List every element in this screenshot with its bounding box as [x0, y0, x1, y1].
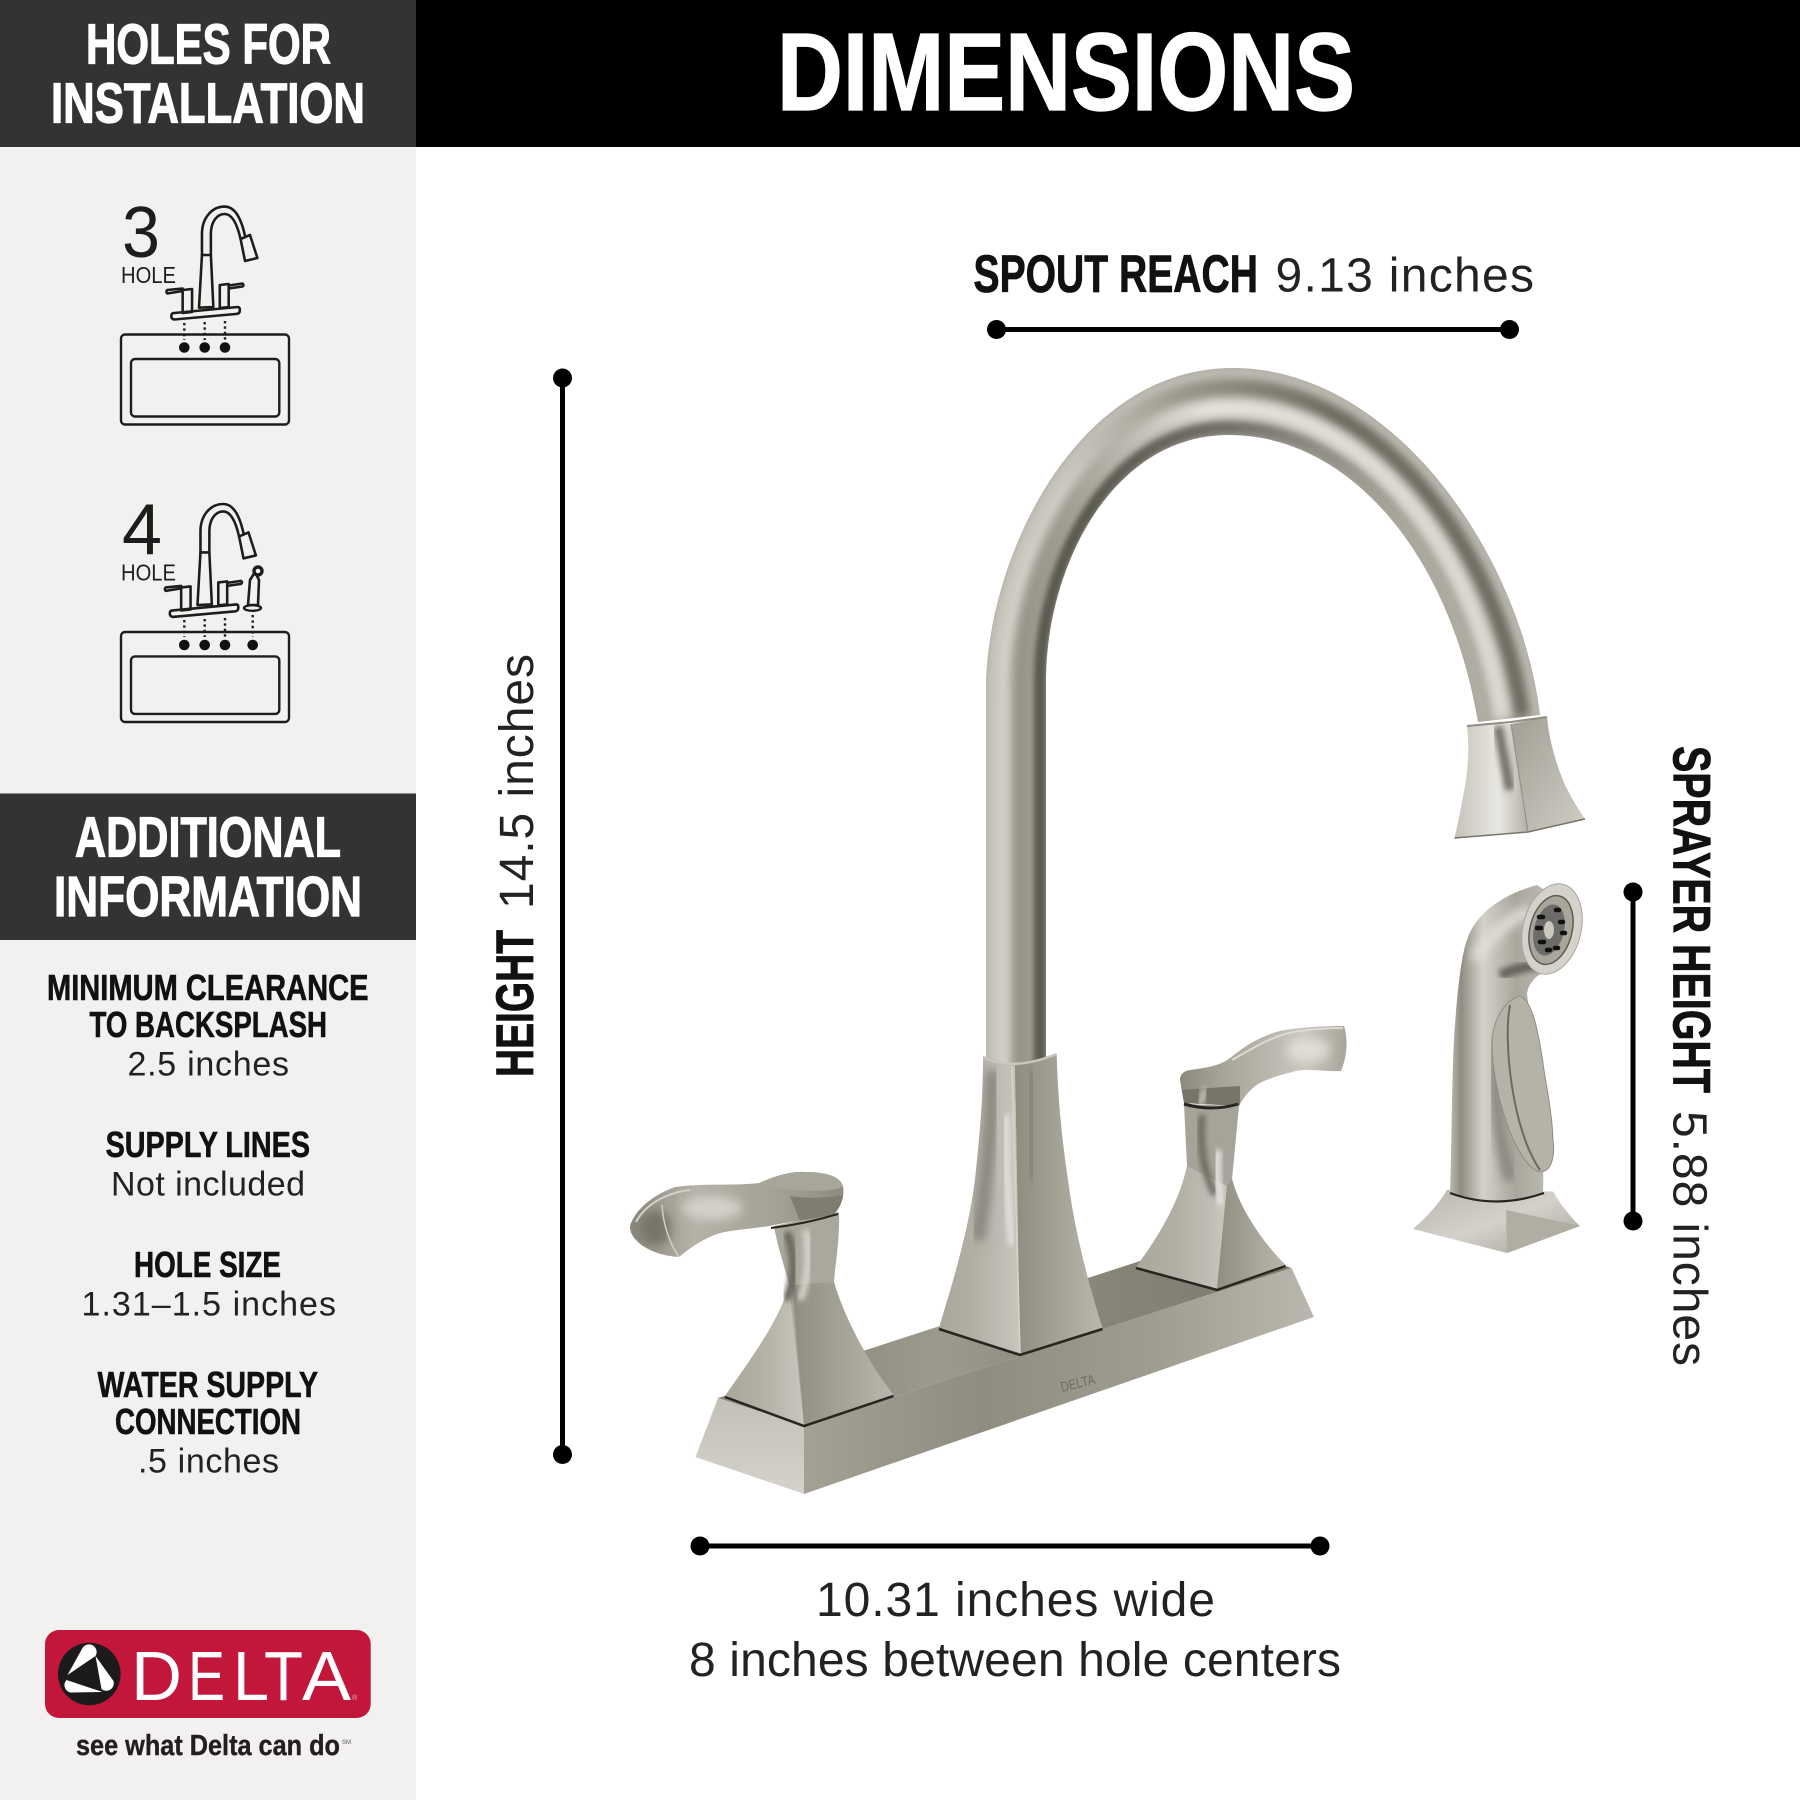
info: hole size: 1.31–1.5 inches [82, 1286, 336, 1324]
info: hole size: HOLE SIZE [134, 1244, 281, 1285]
deck plate [696, 1240, 1314, 1494]
left lever [630, 1172, 843, 1257]
info: water supply connection: CONNECTION [115, 1401, 301, 1442]
info: supply lines [106, 1124, 310, 1204]
info: water supply connection [98, 1364, 318, 1480]
right handle [1136, 1026, 1347, 1290]
info: minimum clearance: MINIMUM CLEARANCE [47, 967, 368, 1008]
header: additional information [0, 794, 416, 940]
logo: delta: D [131, 1637, 182, 1715]
info: minimum clearance [47, 967, 368, 1084]
dimension line: height [553, 368, 572, 1464]
deck plate: DELTA [1059, 1371, 1097, 1395]
icon: 3 hole sink and faucet: HOLE [121, 262, 176, 288]
dimension line: spout reach [987, 320, 1519, 339]
side sprayer [1413, 877, 1591, 1253]
sprayer trigger [1492, 996, 1554, 1172]
info: hole size [82, 1244, 336, 1324]
label: width and hole centers: 10.31 inches wide [816, 1574, 1215, 1627]
label: height: 14.5 inches [491, 654, 544, 909]
sprayer head [1513, 877, 1591, 981]
header: holes for installation [0, 0, 416, 147]
info: minimum clearance: TO BACKSPLASH [90, 1004, 327, 1045]
logo: delta: T [264, 1637, 303, 1715]
faucet product image [630, 350, 1591, 1494]
logo: delta: SM [342, 1740, 351, 1746]
header: holes for installation: INSTALLATION [51, 72, 365, 136]
header: additional information: ADDITIONAL [75, 806, 341, 870]
label: sprayer height: SPRAYER HEIGHT [1662, 746, 1720, 1093]
label: width and hole centers [689, 1574, 1341, 1687]
sprayer base [1413, 1190, 1580, 1253]
icon: 4 hole sink and faucet with sprayer [121, 490, 289, 722]
spout nozzle [1454, 717, 1585, 838]
label: spout reach: 9.13 inches [1276, 250, 1534, 302]
logo: delta [45, 1630, 371, 1762]
logo: delta: A [302, 1637, 351, 1715]
dimension line: width [690, 1536, 1330, 1556]
left sidebar panel [0, 0, 416, 1800]
header: additional information: INFORMATION [54, 865, 362, 929]
icon: 3 hole sink and faucet: 3 [122, 193, 160, 273]
icon: 3 hole sink and faucet [121, 193, 289, 424]
icon: 4 hole sink and faucet with sprayer: HOLE [121, 559, 176, 585]
left handle [630, 1172, 894, 1426]
center column [939, 1054, 1102, 1355]
dimension line: sprayer height [1624, 882, 1642, 1230]
label: height [486, 654, 545, 1077]
logo: delta: see what Delta can do [76, 1730, 340, 1762]
info: water supply connection: .5 inches [138, 1442, 279, 1480]
icon: 4 hole sink and faucet with sprayer: 4 [122, 490, 162, 570]
logo: delta: E [188, 1637, 225, 1715]
info: water supply connection: WATER SUPPLY [98, 1364, 318, 1405]
label: spout reach [974, 245, 1534, 304]
right lever [1180, 1026, 1347, 1106]
info: supply lines: Not included [111, 1166, 305, 1204]
title: dimensions: DIMENSIONS [777, 11, 1355, 134]
info: supply lines: SUPPLY LINES [106, 1124, 310, 1165]
title: dimensions [416, 0, 1800, 147]
label: width and hole centers: 8 inches between hole centers [689, 1634, 1341, 1687]
info: minimum clearance: 2.5 inches [128, 1046, 289, 1084]
label: height: HEIGHT [486, 930, 545, 1077]
label: sprayer height: 5.88 inches [1662, 1111, 1716, 1366]
logo: delta: L [233, 1637, 269, 1715]
header: holes for installation: HOLES FOR [86, 12, 331, 76]
label: spout reach: SPOUT REACH [974, 245, 1258, 304]
sprayer body [1450, 885, 1560, 1202]
logo: delta: ® [352, 1694, 358, 1702]
faucet spout arc [970, 350, 1560, 1110]
